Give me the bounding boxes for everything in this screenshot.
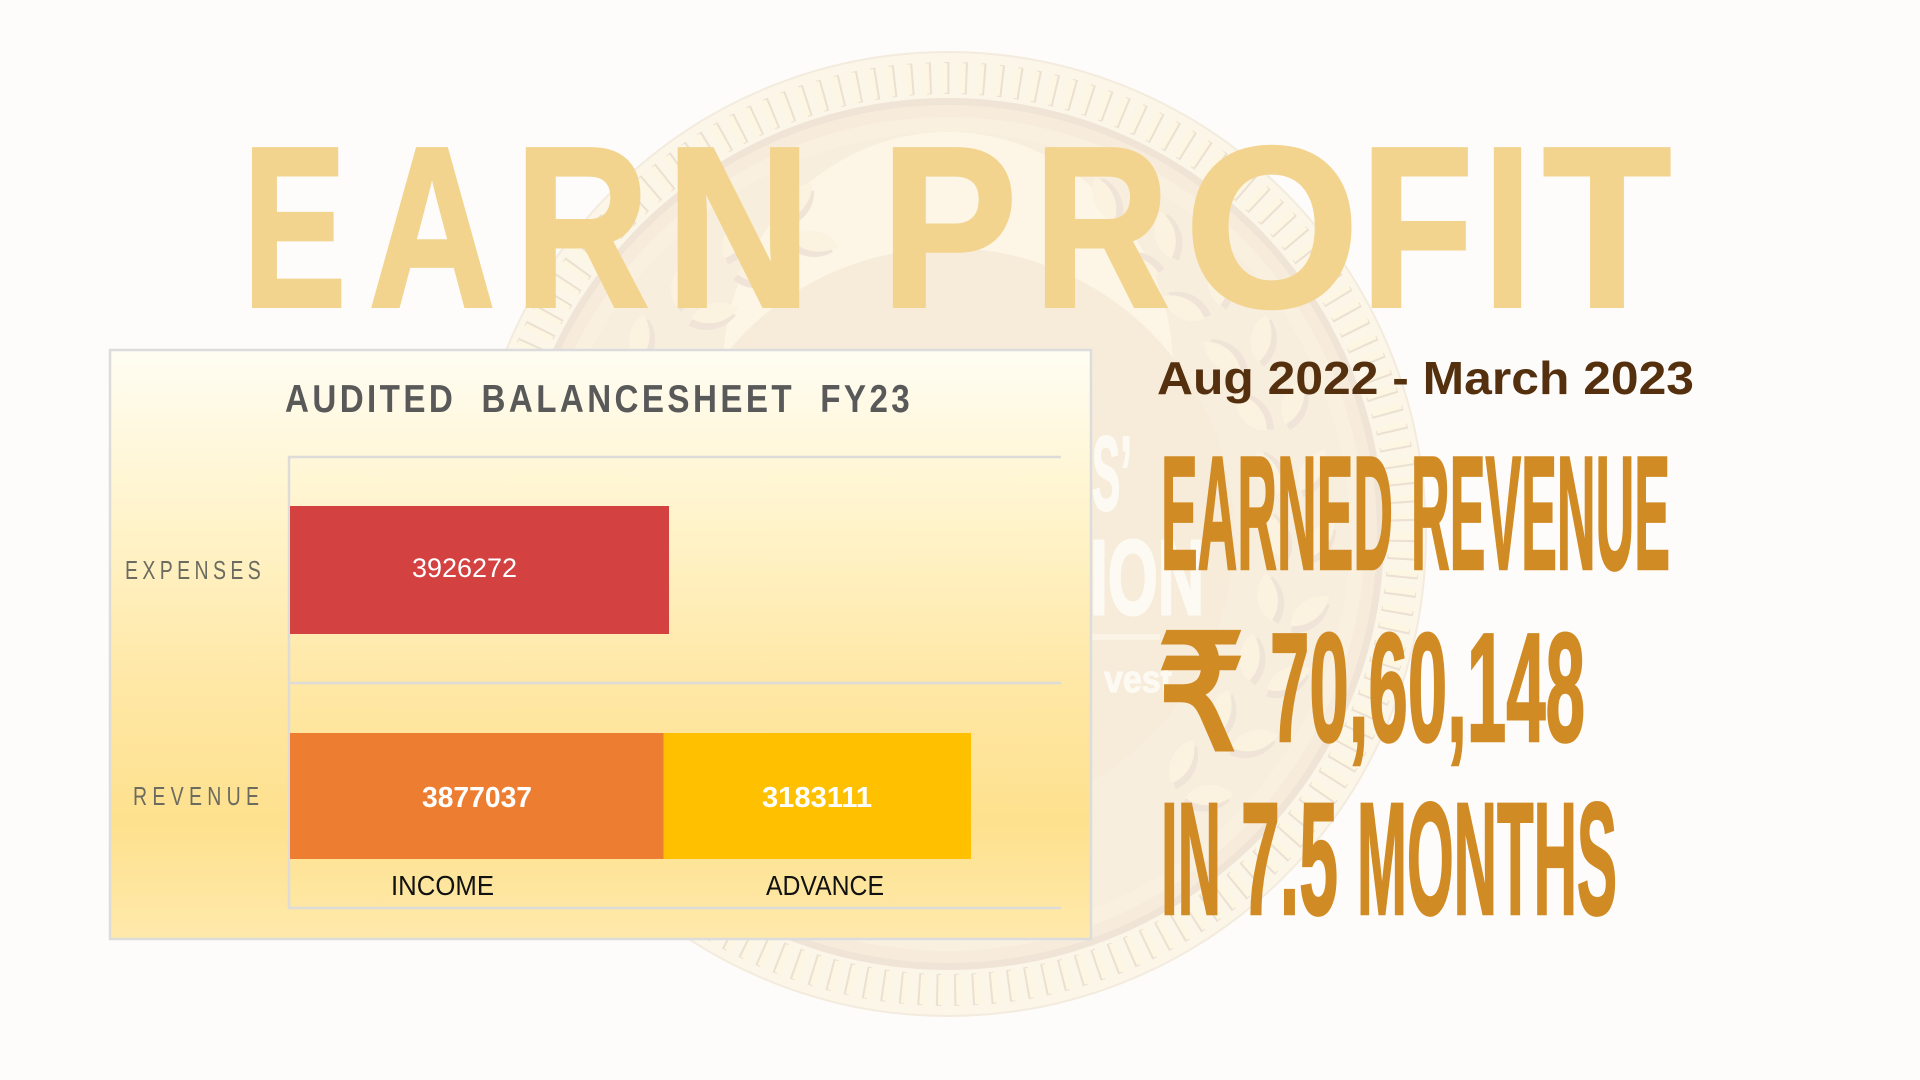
headline: in 7.5 months (1161, 769, 1617, 948)
bar: revenue advance (664, 733, 971, 859)
headline: in 7.5 months: 7.5 (1241, 769, 1338, 948)
headline: earned revenue: EARNED (1161, 423, 1393, 604)
figure: rupee amount (1157, 601, 1585, 783)
coin lettering: S’ (1092, 415, 1132, 533)
coin watermark (470, 52, 1426, 1016)
title: EARN PROFIT: N (666, 101, 811, 355)
title: EARN PROFIT: E (243, 101, 346, 355)
figure: rupee amount: ₹ (1157, 604, 1245, 783)
legend: advance: ADVANCE (766, 870, 884, 901)
wreath right (1048, 160, 1347, 837)
title: EARN PROFIT: T (1543, 101, 1671, 355)
coin lettering (1090, 415, 1204, 701)
wreath left (607, 172, 854, 402)
chart grid (288, 457, 1061, 908)
title: EARN PROFIT: R (515, 101, 649, 355)
bar: expenses: 3926272 (412, 553, 517, 583)
coin lettering: ION (1090, 519, 1204, 637)
category label: expenses: EXPENSES (125, 555, 264, 585)
title: EARN PROFIT: A (369, 101, 495, 355)
bar: revenue advance: 3183111 (762, 782, 872, 814)
date range: Aug 2022 - March 2023 (1157, 352, 1694, 404)
title: EARN PROFIT: P (881, 101, 1017, 355)
bar: revenue income (290, 733, 664, 859)
chart heading: AUDITED BALANCESHEET FY23 (285, 376, 911, 421)
title: EARN PROFIT (243, 101, 1671, 355)
title: EARN PROFIT: F (1361, 101, 1473, 355)
legend: income: INCOME (391, 870, 494, 901)
title: EARN PROFIT: O (1185, 101, 1359, 355)
headline: in 7.5 months: IN (1161, 769, 1221, 948)
category label: revenue: REVENUE (133, 781, 262, 811)
bar: expenses (290, 506, 669, 634)
title: EARN PROFIT: I (1484, 101, 1531, 355)
bar: revenue income: 3877037 (422, 782, 532, 814)
panel: audited balancesheet chart (110, 350, 1091, 939)
coin lettering: vest (1104, 659, 1172, 701)
title: EARN PROFIT: R (1034, 101, 1169, 355)
